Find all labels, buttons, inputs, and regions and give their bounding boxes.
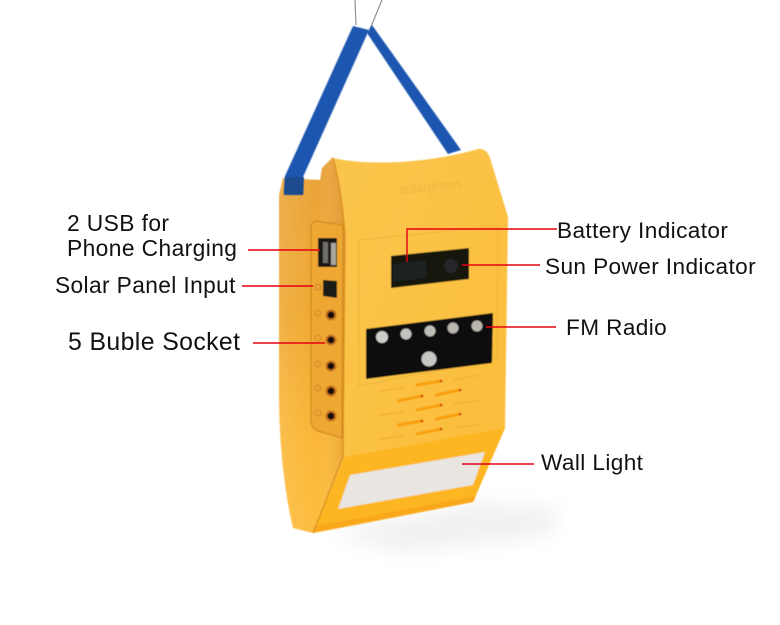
indicator display panel — [391, 248, 469, 288]
bulb sockets — [315, 310, 336, 422]
right strap — [367, 25, 461, 154]
brand mark: solargreen — [399, 176, 461, 197]
inner panel outline — [359, 226, 498, 386]
label: 2 USB for Phone Charging: 2 USB for — [67, 210, 169, 236]
side port plate — [311, 221, 343, 438]
floor shadow — [330, 503, 560, 552]
wall light panel — [338, 452, 485, 509]
label: 5 Buble Socket: 5 Buble Socket — [68, 329, 240, 356]
front face — [313, 149, 508, 533]
left strap — [284, 26, 369, 194]
label: Battery Indicator: Battery Indicator — [557, 218, 728, 243]
strap end stitching — [284, 177, 304, 195]
label: Sun Power Indicator: Sun Power Indicator — [545, 254, 756, 279]
side housing — [279, 157, 347, 533]
solar input port — [315, 280, 337, 298]
label: Wall Light: Wall Light — [541, 450, 644, 475]
label: FM Radio: FM Radio — [566, 315, 667, 340]
USB ports — [318, 238, 337, 267]
lower bevel — [313, 428, 505, 533]
hanging wire — [355, 0, 382, 29]
device: solar lantern body — [279, 149, 508, 533]
vent slots — [379, 375, 480, 440]
button panel — [366, 313, 493, 379]
label: 2 USB for Phone Charging: Phone Charging — [67, 235, 237, 261]
label: Solar Panel Input: Solar Panel Input — [55, 272, 236, 298]
callout lines — [242, 229, 557, 464]
edge crease — [313, 158, 345, 533]
